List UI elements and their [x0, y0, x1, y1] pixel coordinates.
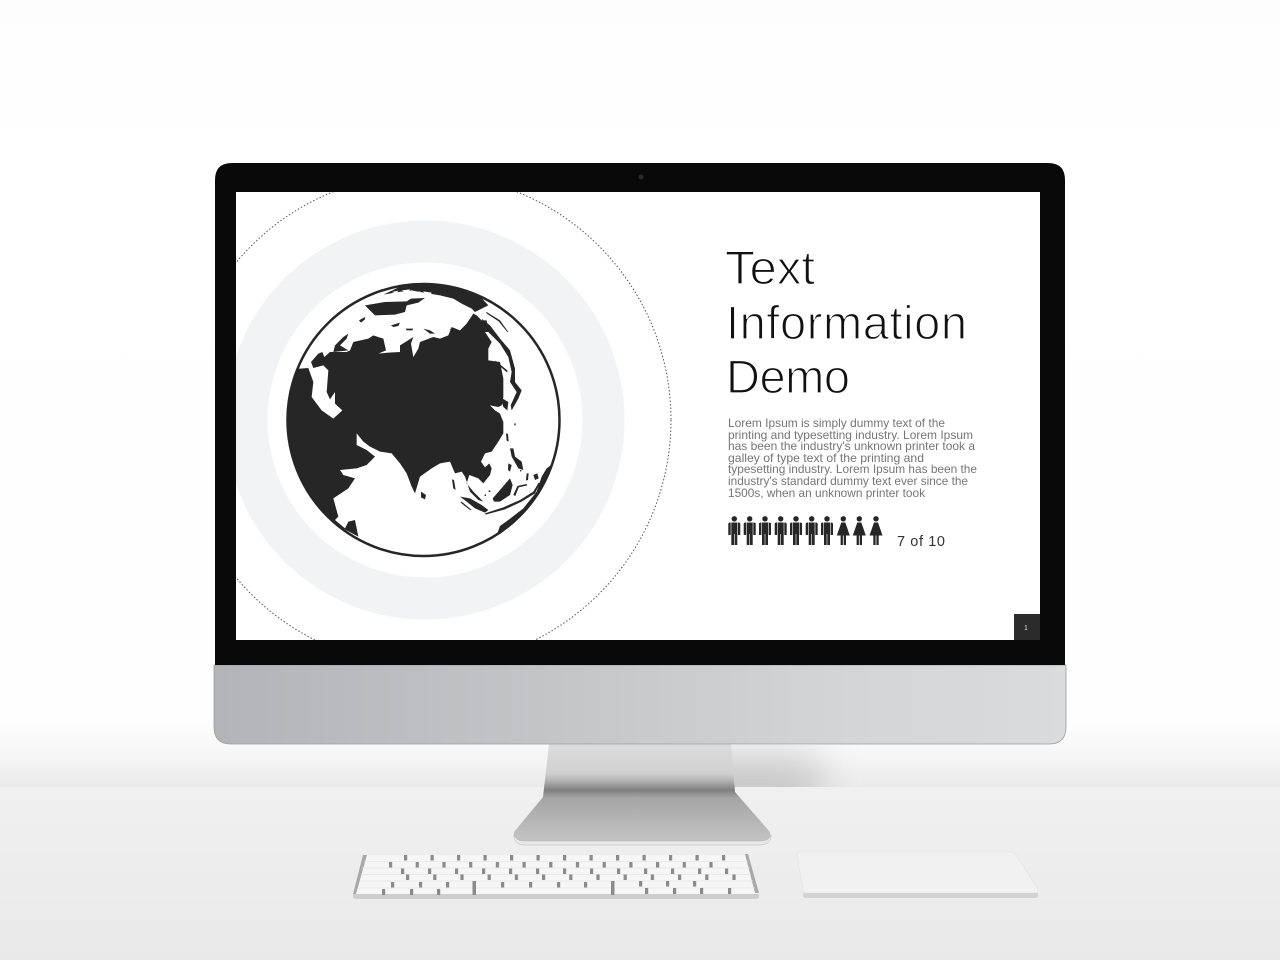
- page number: [1014, 614, 1040, 640]
- key rows: [358, 855, 755, 888]
- Borneo: [493, 478, 513, 502]
- trackpad: [797, 852, 1038, 898]
- title: Demo: [726, 350, 850, 403]
- East coast strip: [482, 319, 522, 410]
- keyboard: [353, 854, 759, 899]
- monitor stand: [514, 744, 771, 845]
- Taiwan and dots: [506, 423, 516, 442]
- bottom row gaps: [382, 881, 731, 895]
- silver chin: [214, 665, 1066, 744]
- Sulawesi strokes: [513, 473, 539, 496]
- slide: rings: [236, 192, 672, 640]
- Sri Lanka: [421, 492, 426, 499]
- Kuril chain: [486, 312, 508, 332]
- Sakhalin stroke: [495, 360, 507, 373]
- Arctic island: [365, 298, 425, 315]
- dotted ring: [236, 192, 672, 640]
- title: Information: [726, 296, 967, 349]
- icon: globe: [275, 280, 562, 556]
- body text: has been the industry's unknown printer took a: [728, 439, 975, 453]
- screen: [236, 192, 1040, 640]
- Lesser Sunda arc: [485, 483, 540, 515]
- New Guinea and Australia rim: [498, 466, 550, 532]
- Arctic rim: [384, 285, 488, 312]
- title: Text: [725, 241, 815, 294]
- Korea: [502, 398, 508, 410]
- Java: [461, 502, 472, 510]
- page number: 1: [1024, 625, 1028, 632]
- title: [725, 241, 967, 403]
- body text: typesetting industry. Lorem Ipsum has been the: [728, 462, 977, 476]
- Small northern islands: [333, 317, 458, 352]
- count label: 7 of 10: [897, 534, 945, 550]
- body text: galley of type text of the printing and: [728, 451, 924, 465]
- body text: printing and typesetting industry. Lorem Ipsum: [728, 428, 973, 442]
- body text: [728, 416, 977, 500]
- Arctic ice specks: [392, 289, 432, 294]
- body text: Lorem Ipsum is simply dummy text of the: [728, 416, 945, 430]
- body text: 1500s, when an unknown printer took: [728, 486, 926, 500]
- Sumatra: [460, 497, 488, 513]
- Eurasia and Africa land mass: [275, 314, 503, 537]
- grey ring: [246, 242, 604, 598]
- stand shadow on wall: [731, 745, 833, 787]
- webcam: [638, 174, 644, 180]
- black bezel: [215, 163, 1065, 665]
- dots: [485, 470, 527, 496]
- monitor body: [214, 163, 1066, 744]
- background: desk: [0, 787, 1280, 960]
- body text: industry's standard dummy text ever since the: [728, 474, 968, 488]
- Philippines: [452, 448, 523, 490]
- pictogram: people: [728, 516, 882, 545]
